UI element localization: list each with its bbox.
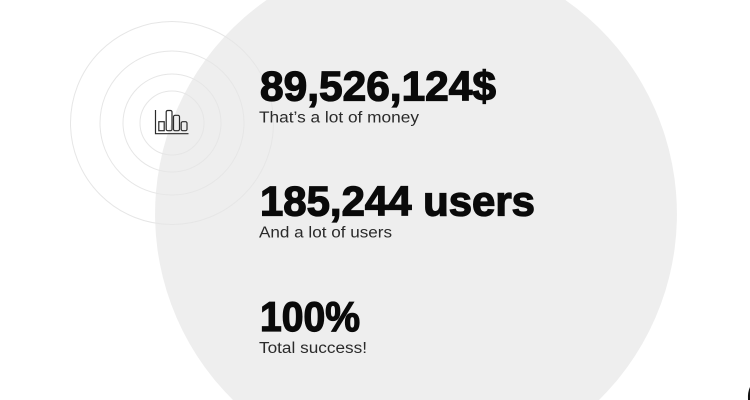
corner mark	[748, 387, 750, 400]
success value: 100%	[260, 293, 360, 340]
money value: 89,526,124$	[260, 62, 496, 110]
success caption: Total success!	[259, 340, 367, 357]
money caption: That’s a lot of money	[259, 110, 419, 126]
users caption: And a lot of users	[259, 224, 392, 242]
icon: bar chart	[156, 110, 188, 134]
stat: success	[259, 293, 367, 357]
users value: 185,244 users	[260, 178, 535, 224]
concentric rings	[70, 22, 274, 224]
background circle	[155, 0, 677, 400]
stat: money	[259, 62, 496, 126]
stat: users	[259, 178, 535, 242]
